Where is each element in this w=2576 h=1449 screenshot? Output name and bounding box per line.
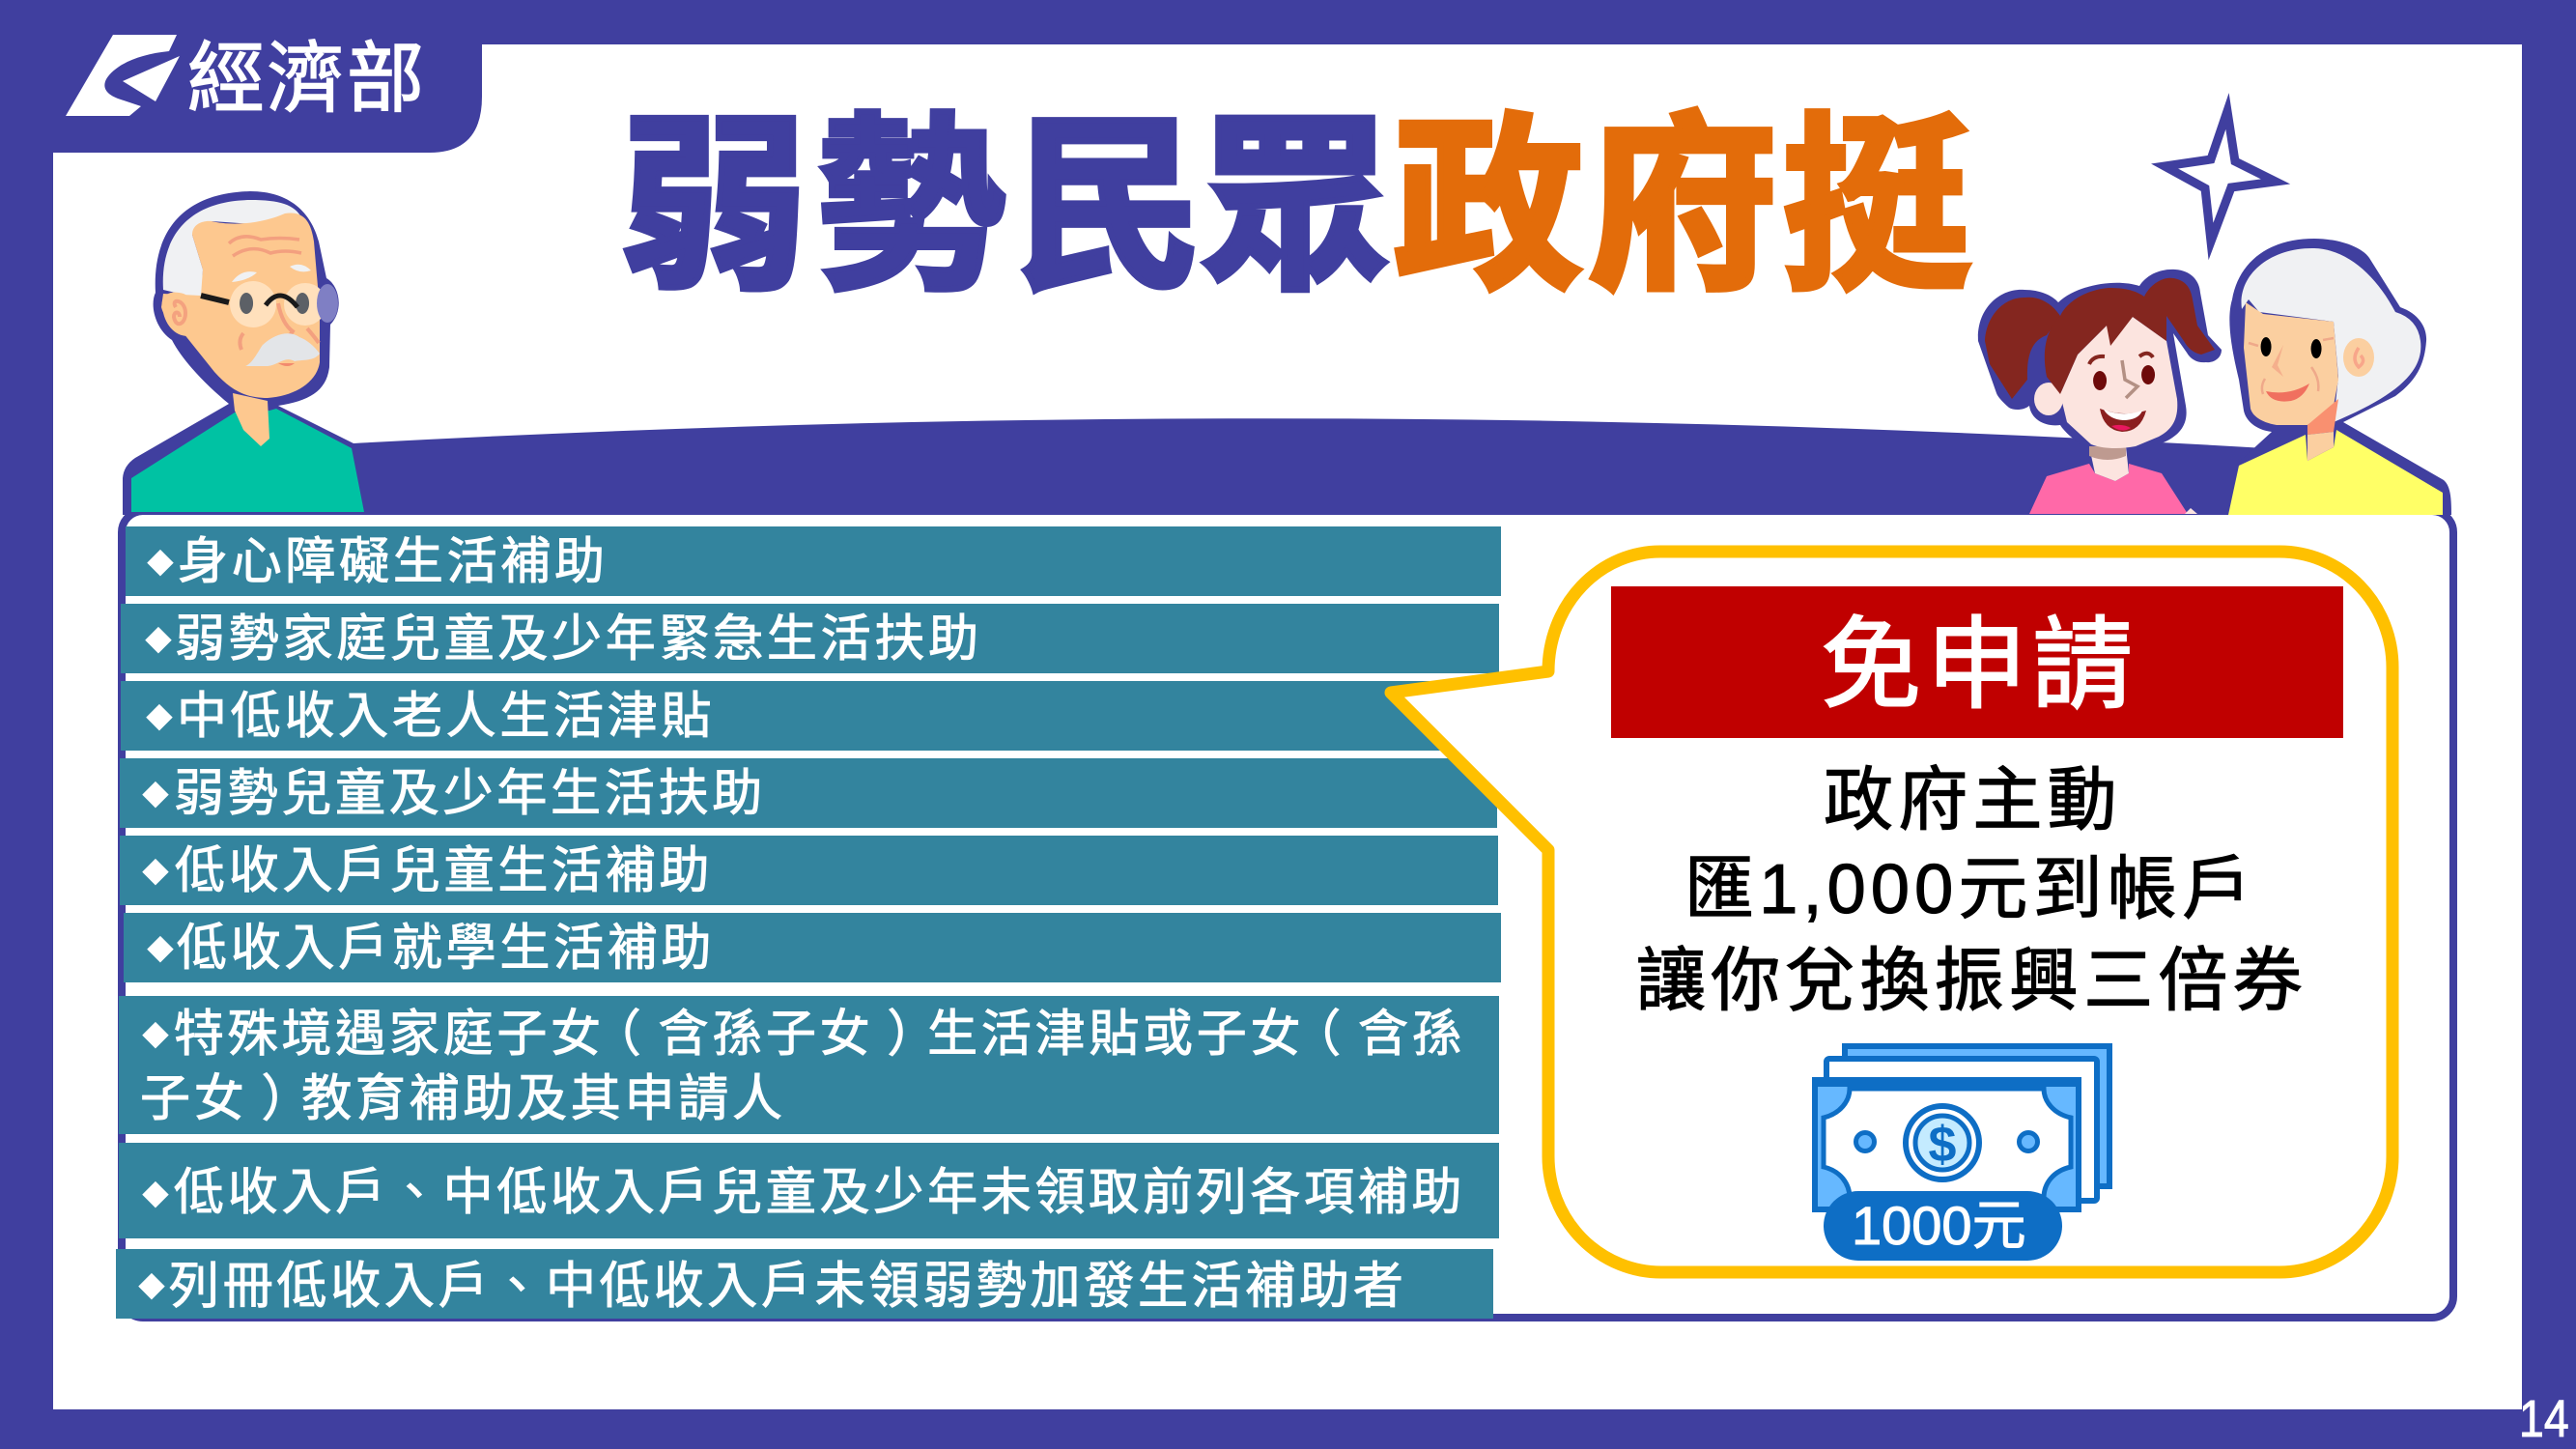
list row 3: [121, 675, 1500, 751]
list row 9: 列冊低收入戶、中低收入戶未領弱勢加發生活補助者: [169, 1245, 1407, 1318]
glasses lenses: [230, 281, 276, 327]
header tab with ministry logo: [48, 16, 482, 153]
girl shirt: [2029, 464, 2188, 514]
grandmother outline: [2228, 239, 2451, 515]
girl brows: [2089, 354, 2153, 364]
list row 2: ◆: [145, 618, 172, 658]
amount pill: [1824, 1191, 2062, 1261]
list row 5: ◆: [142, 850, 169, 890]
title: 弱勢民眾: [619, 54, 1390, 327]
list row 7: [119, 993, 1499, 1134]
icon: ministry logo: [66, 35, 180, 116]
list row 6: ◆: [147, 927, 174, 967]
middle note: [1826, 1059, 2097, 1201]
grandmother mouth: [2266, 384, 2309, 402]
callout body text: 政府主動: [1824, 762, 2122, 839]
note centre: [1824, 1089, 2071, 1198]
list row 9: ◆: [138, 1264, 165, 1304]
illustration: elderly man: [123, 191, 364, 515]
grandmother eyes: [2261, 337, 2322, 358]
icon: stack of banknotes: $: [1929, 1117, 1957, 1173]
moustache: [245, 333, 320, 366]
shirt: [131, 409, 364, 512]
list row 4: ◆: [142, 773, 169, 812]
red no-application banner: 免申請: [1821, 582, 2138, 728]
ministry name: 經濟部: [187, 16, 427, 128]
grandmother wrinkles: [2249, 338, 2334, 394]
icon: sparkle star: [2165, 111, 2276, 242]
girl mouth: [2100, 409, 2146, 432]
list row 1: 身心障礙生活補助: [178, 521, 609, 593]
white content panel: [122, 511, 2453, 1318]
list row 8: ◆: [142, 1173, 169, 1212]
icon: stack of banknotes: [1812, 1046, 2109, 1261]
grandmother face: [2244, 302, 2338, 425]
icon: stack of banknotes: 1000元: [1852, 1195, 2026, 1256]
girl nose: [2122, 360, 2137, 398]
girl neck: [2089, 446, 2129, 481]
list row 3: ◆: [146, 696, 173, 735]
list row 4: [120, 753, 1497, 828]
list row 6: 低收入戶就學生活補助: [177, 907, 715, 980]
page number: 14: [2519, 1389, 2569, 1448]
girl outline: [1978, 270, 2222, 515]
eyes: [240, 293, 309, 314]
list row 6: [124, 907, 1501, 982]
curved purple band: [354, 418, 2265, 515]
list row 1: ◆: [147, 541, 174, 581]
list row 2: [121, 598, 1499, 673]
list row 7: 子女 ）教育補助及其申請人: [140, 1058, 786, 1130]
forehead wrinkles: [229, 237, 301, 256]
list row 8: 低收入戶、中低收入戶兒童及少年未領取前列各項補助: [174, 1151, 1465, 1224]
girl hair: [1985, 298, 2060, 399]
callout body text: [1636, 762, 2307, 1020]
right lens: [317, 284, 338, 323]
list row 7: ◆: [142, 1013, 169, 1053]
face: [161, 213, 320, 398]
callout body text: 匯1,000元到帳戶: [1684, 851, 2256, 928]
neck: [233, 393, 269, 446]
girl eyes: [2093, 365, 2155, 390]
grandmother hair: [2242, 248, 2420, 422]
grandmother neck: [2307, 399, 2338, 435]
coin: [1906, 1106, 1979, 1179]
hair: [163, 200, 301, 321]
list row 5: [120, 830, 1498, 905]
girl ear: [2034, 383, 2063, 415]
grandmother shirt: [2228, 430, 2443, 515]
eyebrows: [232, 265, 311, 282]
list row 3: 中低收入老人生活津貼: [177, 675, 715, 748]
ear: [162, 293, 197, 336]
nose: [240, 303, 319, 350]
grandmother ear: [2343, 338, 2374, 377]
list row 4: 弱勢兒童及少年生活扶助: [174, 753, 766, 825]
list row 5: 低收入戶兒童生活補助: [175, 830, 713, 902]
glasses arm: [201, 296, 229, 302]
grandmother nose: [2272, 345, 2283, 377]
list row 1: [126, 521, 1501, 596]
girl face: [2060, 317, 2177, 448]
front note: [1815, 1080, 2079, 1209]
title: 政府挺: [1394, 54, 1971, 327]
title: [619, 54, 1971, 327]
callout body text: 讓你兌換振興三倍券: [1636, 943, 2307, 1020]
note dots: [1856, 1132, 1874, 1151]
red no-application banner: [1611, 582, 2343, 738]
back note: [1845, 1046, 2109, 1186]
list row 7: 特殊境遇家庭子女（ 含孫子女 ）生活津貼或子女（ 含孫: [174, 993, 1465, 1065]
illustration: girl and grandmother: [1978, 239, 2451, 515]
callout speech bubble: [1391, 552, 2392, 1272]
list row 2: 弱勢家庭兒童及少年緊急生活扶助: [175, 598, 982, 670]
